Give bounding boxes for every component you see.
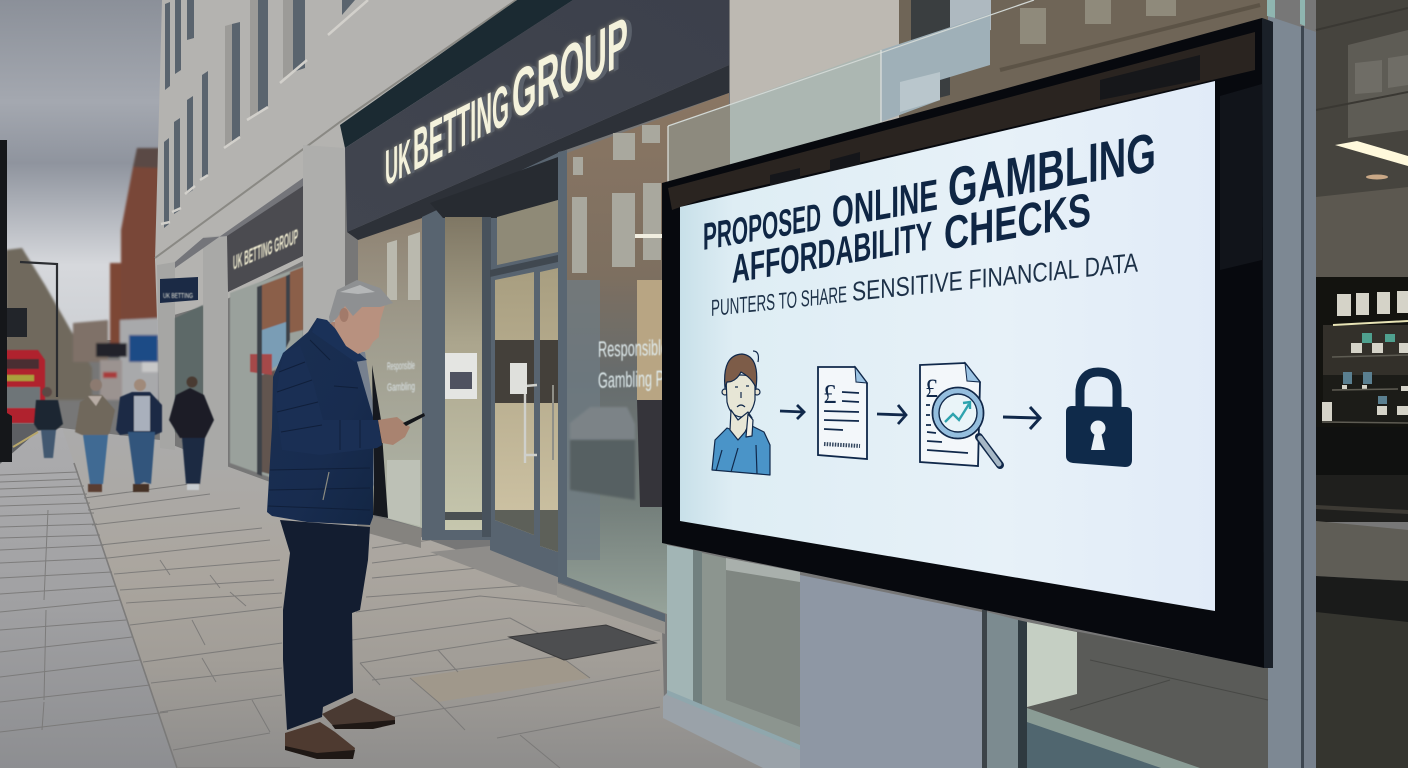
icon: worried person: [712, 351, 770, 475]
pillar between signs: [303, 145, 345, 345]
near shoe: [285, 722, 355, 759]
ear: [340, 308, 348, 322]
display title line one: [703, 121, 1156, 259]
arrow 2: [877, 405, 906, 424]
shop base stone: [357, 512, 421, 548]
man checking phone: [267, 280, 425, 759]
text: UK BETTING GROUP: [233, 225, 298, 275]
large right shop window: Responsible: [598, 335, 668, 362]
distant street scene: [6, 148, 159, 400]
large right shop window: [567, 93, 729, 614]
face: [335, 305, 385, 354]
window reveals and sills: [161, 0, 368, 224]
support pillar right: [1268, 16, 1316, 768]
display subtitle: PUNTERS TO SHARE: [711, 281, 847, 321]
upper window and building reflection: [899, 0, 1270, 125]
arrow 1: [780, 405, 804, 419]
display title line one: ONLINE: [832, 171, 938, 238]
lower right glass: [1027, 622, 1268, 768]
display title line two: CHECKS: [944, 183, 1091, 261]
main soffit: [340, 0, 573, 148]
shirt panel: [350, 352, 378, 487]
lower glass box: [663, 545, 800, 768]
inner jacket panel: [372, 365, 388, 518]
fascia sign letter depth: UK: [389, 128, 415, 196]
far shoe: [322, 698, 395, 729]
upper stone wall: [730, 0, 899, 170]
display title line one: PROPOSED: [703, 196, 821, 259]
jacket sleeve: [275, 345, 382, 455]
large right shop window: Gambling Pa: [598, 366, 671, 393]
paving joints: [0, 463, 660, 768]
jacket: [267, 318, 373, 525]
lower post: [982, 610, 1027, 768]
red double decker bus: [6, 350, 45, 423]
interior right: shelving: [1316, 277, 1408, 427]
street lamp: [20, 262, 57, 397]
grey kerb strip of pavement: [0, 428, 177, 768]
pocket zip: [323, 472, 329, 500]
arrow 3: [1003, 407, 1040, 429]
fascia sign: UK: [385, 129, 411, 197]
far left shop pillar: [157, 262, 175, 450]
band under main fascia: [347, 65, 729, 240]
collar: [312, 318, 367, 362]
stone cornice line: [155, 0, 516, 258]
door bay: [422, 152, 560, 578]
display subtitle: SENSITIVE FINANCIAL DATA: [852, 247, 1138, 307]
icon: document under magnifying glass: [920, 363, 1000, 466]
storefront left window: Gambling: [387, 381, 415, 394]
icon: document under magnifying glass: £: [925, 374, 938, 403]
hair: [329, 280, 393, 324]
small shop soffit: [175, 178, 303, 268]
doormat grating: [430, 546, 558, 596]
road: [0, 424, 40, 464]
street drain grate: [509, 625, 656, 660]
yellow kerb line: [13, 432, 38, 447]
display title line one: GAMBLING: [948, 121, 1156, 219]
upper floor windows: [164, 0, 355, 228]
small shop windows: [175, 266, 303, 478]
walker with t-shirt: [116, 379, 162, 492]
big window base stone: [557, 583, 665, 634]
digital display frame: [662, 18, 1273, 668]
storefront left window: [358, 217, 422, 528]
fascia sign glow: UK: [385, 129, 411, 197]
jeans: [280, 520, 370, 730]
sky: [0, 0, 170, 340]
display title line two: AFFORDABILITY: [732, 213, 932, 292]
hanging sign: [160, 277, 198, 303]
hair highlight: [340, 285, 375, 294]
jacket quilting: [268, 340, 370, 510]
icon: financial document: [818, 367, 867, 459]
big window metal frame: [558, 150, 665, 622]
glass balustrade: [668, 0, 1034, 183]
hanging sign: UK BETTING: [163, 293, 193, 300]
main building stone facade: [155, 0, 570, 320]
walker from behind: [169, 376, 214, 490]
walker in beige coat: [75, 379, 115, 492]
display subtitle: [711, 247, 1138, 321]
storefront left window: Responsible: [387, 360, 415, 373]
neck: [326, 322, 358, 350]
glass fin on pillar top: [1267, 0, 1305, 26]
display screen: [680, 81, 1215, 611]
small shop fascia sign: [227, 186, 303, 292]
tan paving slab: [410, 656, 590, 702]
main fascia: [345, 0, 729, 232]
interior right: counter: [1316, 427, 1408, 768]
lamp post foreground: [0, 140, 12, 462]
icon: padlock: [1066, 372, 1132, 467]
lower column: [800, 575, 982, 768]
interior right: ceiling and wall: [1316, 0, 1408, 284]
pavement: [0, 428, 800, 768]
walker in black: [34, 387, 63, 458]
icon: financial document: £: [823, 379, 836, 409]
street sign box: [7, 308, 27, 337]
background pedestrians: [34, 376, 214, 492]
pillar left: [203, 235, 228, 470]
hand and phone: [378, 413, 425, 445]
